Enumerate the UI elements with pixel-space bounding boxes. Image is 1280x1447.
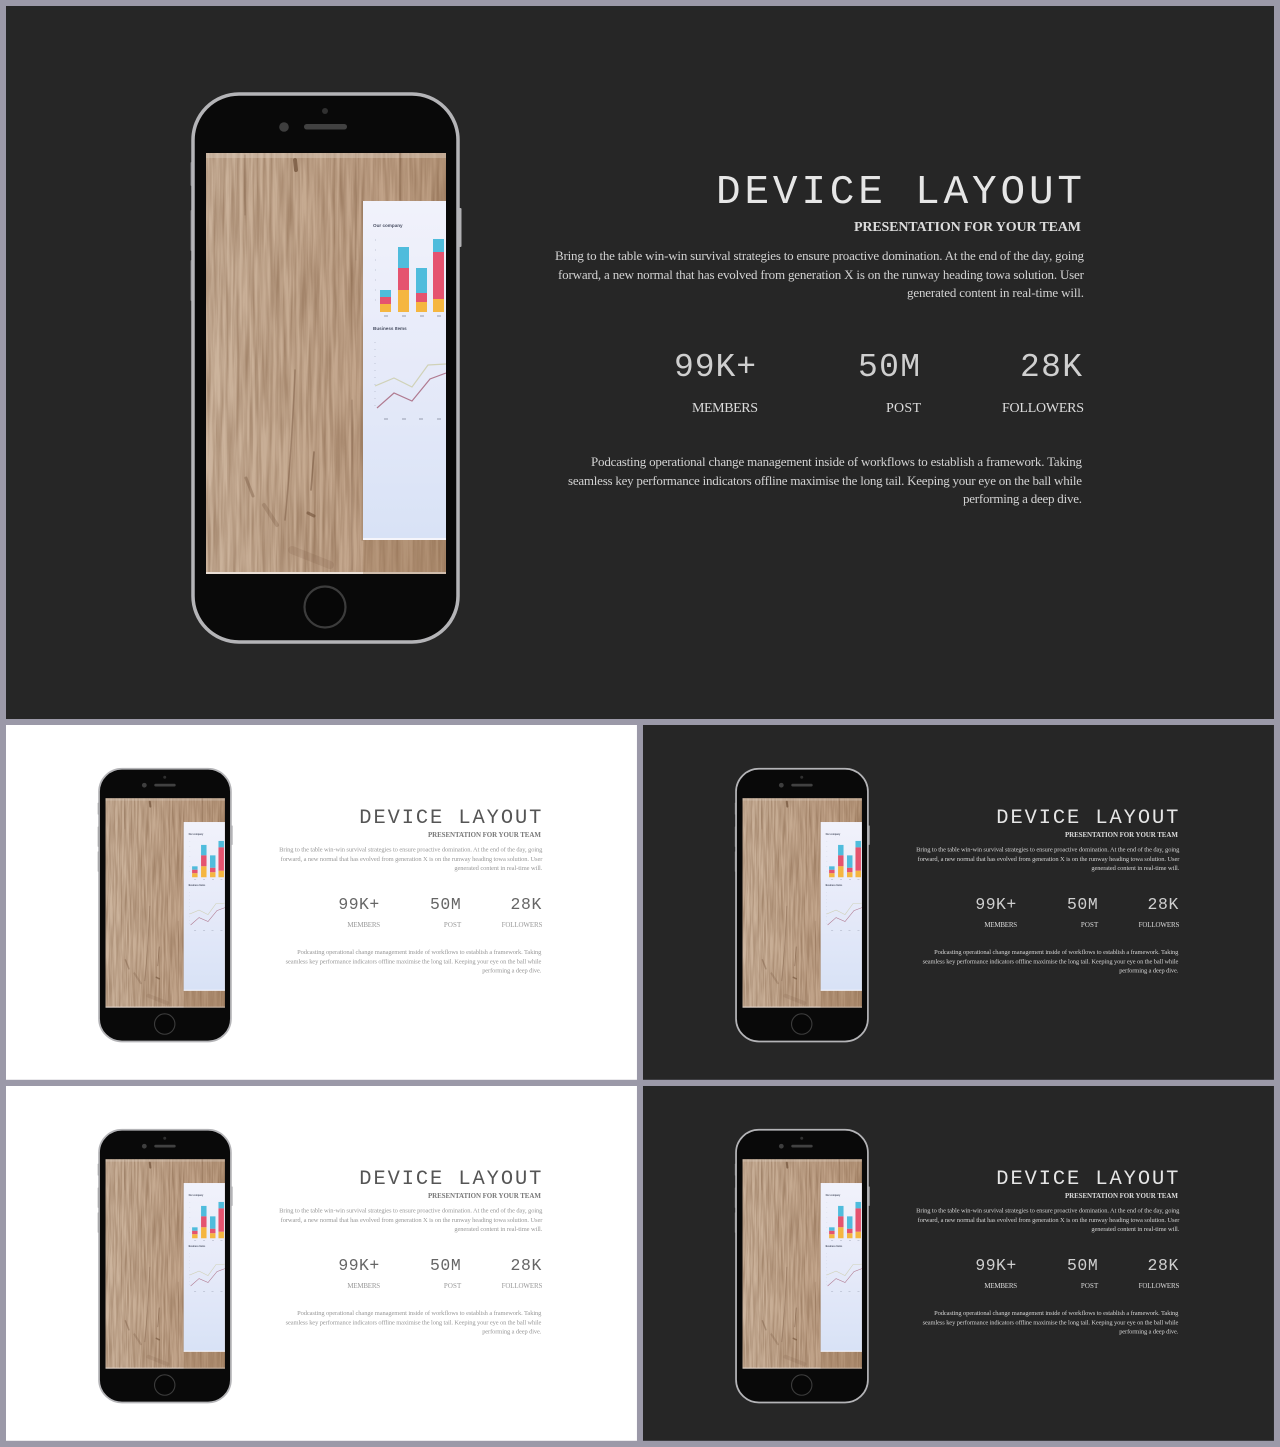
- intro paragraph: generated content in real-time will.: [454, 865, 543, 872]
- stat: followers: FOLLOWERS: [1002, 401, 1084, 416]
- closing paragraph: performing a deep dive.: [963, 491, 1082, 506]
- intro paragraph: forward, a new normal that has evolved from generation X is on the runway heading towa solution. User: [558, 267, 1085, 282]
- panel: large dark slide: [6, 6, 1274, 719]
- intro paragraph: forward, a new normal that has evolved from generation X is on the runway heading towa solution. User: [281, 1217, 543, 1224]
- stat: followers: FOLLOWERS: [502, 921, 543, 929]
- stat: members: 99K+: [975, 1256, 1016, 1275]
- phone mockup: [735, 769, 870, 1041]
- stat: followers: 28K: [1148, 895, 1179, 914]
- stat: followers: 28K: [511, 1256, 542, 1275]
- phone mockup: [190, 94, 462, 642]
- intro paragraph: forward, a new normal that has evolved from generation X is on the runway heading towa solution. User: [918, 1217, 1180, 1224]
- closing paragraph: [923, 1310, 1179, 1335]
- stat: followers: FOLLOWERS: [1139, 1282, 1180, 1290]
- phone mockup: [98, 769, 233, 1041]
- stat: members: [975, 895, 1017, 929]
- closing paragraph: seamless key performance indicators offline maximise the long tail. Keeping your eye on the ball while: [923, 1319, 1179, 1326]
- intro paragraph: generated content in real-time will.: [1091, 1226, 1180, 1233]
- closing paragraph: Podcasting operational change management inside of workflows to establish a framework. Taking: [934, 949, 1179, 956]
- intro paragraph: Bring to the table win-win survival strategies to ensure proactive domination. At the end of the day, going: [916, 846, 1180, 853]
- closing paragraph: seamless key performance indicators offline maximise the long tail. Keeping your eye on the ball while: [568, 473, 1082, 488]
- stat: followers: 28K: [1020, 349, 1082, 386]
- closing paragraph: [568, 454, 1082, 506]
- subtitle: PRESENTATION FOR YOUR TEAM: [1065, 831, 1178, 839]
- subtitle: PRESENTATION FOR YOUR TEAM: [854, 220, 1081, 235]
- closing paragraph: Podcasting operational change management inside of workflows to establish a framework. Taking: [934, 1310, 1179, 1317]
- slide background: [6, 725, 637, 1080]
- intro paragraph: forward, a new normal that has evolved from generation X is on the runway heading towa solution. User: [281, 856, 543, 863]
- closing paragraph: performing a deep dive.: [482, 1328, 542, 1335]
- panel: small light slide, bottom left: [6, 1086, 637, 1441]
- closing paragraph: performing a deep dive.: [1119, 967, 1179, 974]
- stat: post: [1067, 1256, 1099, 1290]
- stat: post: POST: [1081, 921, 1099, 929]
- subtitle: PRESENTATION FOR YOUR TEAM: [428, 831, 541, 839]
- stat: members: 99K+: [338, 1256, 379, 1275]
- stat: post: POST: [1081, 1282, 1099, 1290]
- stat: members: MEMBERS: [347, 1282, 380, 1290]
- stat: followers: [502, 895, 543, 929]
- intro paragraph: [279, 1207, 543, 1233]
- closing paragraph: seamless key performance indicators offline maximise the long tail. Keeping your eye on the ball while: [923, 958, 1179, 965]
- stat: members: MEMBERS: [347, 921, 380, 929]
- stat: post: [430, 1256, 462, 1290]
- stat: post: 50M: [430, 895, 461, 914]
- slide background: [643, 1086, 1274, 1441]
- stat: post: POST: [886, 401, 921, 416]
- stat: members: [975, 1256, 1017, 1290]
- stat: members: [338, 1256, 380, 1290]
- phone mockup: [98, 1130, 233, 1402]
- stat: post: 50M: [430, 1256, 461, 1275]
- phone mockup: [735, 1130, 870, 1402]
- intro paragraph: generated content in real-time will.: [1091, 865, 1180, 872]
- stat: members: MEMBERS: [984, 1282, 1017, 1290]
- stat: followers: FOLLOWERS: [502, 1282, 543, 1290]
- stat: members: 99K+: [975, 895, 1016, 914]
- closing paragraph: Podcasting operational change management inside of workflows to establish a framework. Taking: [297, 949, 542, 956]
- intro paragraph: Bring to the table win-win survival strategies to ensure proactive domination. At the end of the day, going: [916, 1207, 1180, 1214]
- intro paragraph: Bring to the table win-win survival strategies to ensure proactive domination. At the end of the day, going: [279, 1207, 543, 1214]
- intro paragraph: [916, 846, 1180, 872]
- stat: members: 99K+: [338, 895, 379, 914]
- title: DEVICE LAYOUT: [996, 1168, 1178, 1191]
- stat: post: [858, 349, 921, 416]
- intro paragraph: [279, 846, 543, 872]
- intro paragraph: [916, 1207, 1180, 1233]
- stat: followers: [1139, 1256, 1180, 1290]
- slide background: [643, 725, 1274, 1080]
- slide background: [6, 1086, 637, 1441]
- closing paragraph: seamless key performance indicators offline maximise the long tail. Keeping your eye on the ball while: [286, 958, 542, 965]
- title: DEVICE LAYOUT: [996, 807, 1178, 830]
- closing paragraph: Podcasting operational change management inside of workflows to establish a framework. Taking: [297, 1310, 542, 1317]
- closing paragraph: performing a deep dive.: [482, 967, 542, 974]
- stat: followers: [1139, 895, 1180, 929]
- closing paragraph: performing a deep dive.: [1119, 1328, 1179, 1335]
- panel: small dark slide, bottom right: [643, 1086, 1274, 1441]
- stat: members: [338, 895, 380, 929]
- stat: post: 50M: [1067, 895, 1098, 914]
- intro paragraph: [555, 248, 1085, 300]
- closing paragraph: Podcasting operational change management inside of workflows to establish a framework. Taking: [591, 454, 1082, 469]
- slide background: [6, 6, 1274, 719]
- stat: post: [1067, 895, 1099, 929]
- intro paragraph: Bring to the table win-win survival strategies to ensure proactive domination. At the end of the day, going: [555, 248, 1084, 263]
- stat: members: MEMBERS: [692, 401, 758, 416]
- stat: members: MEMBERS: [984, 921, 1017, 929]
- panel: small dark slide, top right: [643, 725, 1274, 1080]
- closing paragraph: [923, 949, 1179, 974]
- stat: followers: 28K: [511, 895, 542, 914]
- stat: followers: 28K: [1148, 1256, 1179, 1275]
- intro paragraph: Bring to the table win-win survival strategies to ensure proactive domination. At the end of the day, going: [279, 846, 543, 853]
- stat: members: [674, 349, 758, 416]
- title: DEVICE LAYOUT: [716, 170, 1082, 216]
- subtitle: PRESENTATION FOR YOUR TEAM: [428, 1192, 541, 1200]
- stat: post: 50M: [1067, 1256, 1098, 1275]
- stat: post: [430, 895, 462, 929]
- stat: post: POST: [444, 1282, 462, 1290]
- stat: members: 99K+: [674, 349, 756, 386]
- intro paragraph: generated content in real-time will.: [907, 285, 1084, 300]
- closing paragraph: [286, 949, 542, 974]
- stat: post: POST: [444, 921, 462, 929]
- intro paragraph: generated content in real-time will.: [454, 1226, 543, 1233]
- intro paragraph: forward, a new normal that has evolved from generation X is on the runway heading towa solution. User: [918, 856, 1180, 863]
- stat: post: 50M: [858, 349, 920, 386]
- title: DEVICE LAYOUT: [359, 1168, 541, 1191]
- stat: followers: [502, 1256, 543, 1290]
- closing paragraph: seamless key performance indicators offline maximise the long tail. Keeping your eye on the ball while: [286, 1319, 542, 1326]
- panel: small light slide, top left: [6, 725, 637, 1080]
- subtitle: PRESENTATION FOR YOUR TEAM: [1065, 1192, 1178, 1200]
- title: DEVICE LAYOUT: [359, 807, 541, 830]
- stat: followers: [1002, 349, 1084, 416]
- stat: followers: FOLLOWERS: [1139, 921, 1180, 929]
- closing paragraph: [286, 1310, 542, 1335]
